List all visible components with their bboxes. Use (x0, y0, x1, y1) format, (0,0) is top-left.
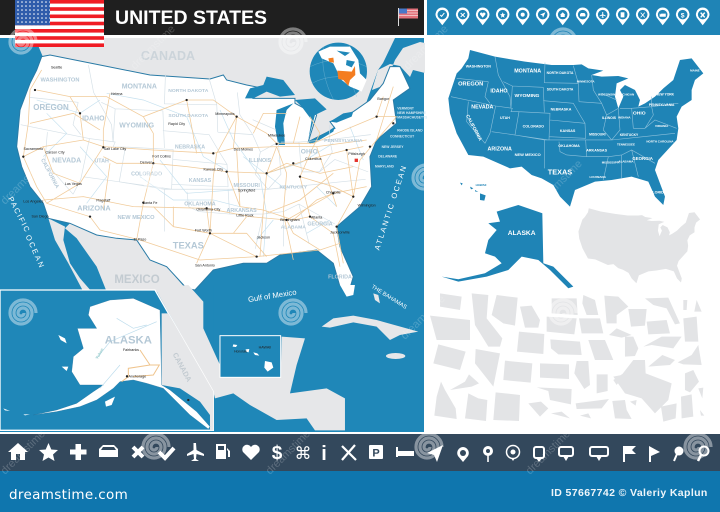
Pacific Ocean label (6, 195, 47, 271)
Alaska islands (3, 335, 115, 415)
northeast state labels: NEW HAMPSHIRE (397, 111, 427, 115)
state labels: MAINE (690, 69, 700, 73)
state labels: ARKANSAS (227, 208, 257, 214)
state labels: TENNESSEE (617, 143, 635, 147)
icon: cross (133, 447, 143, 457)
city labels: Bangor (377, 97, 390, 101)
state labels: NEVADA (471, 105, 494, 111)
icon: send (427, 445, 443, 462)
contiguous US road map (17, 55, 428, 290)
Mexico landmass (65, 223, 188, 292)
state labels: GEORGIA (307, 221, 333, 227)
state labels: OKLAHOMA (558, 144, 580, 148)
city labels: San Diego (31, 214, 49, 218)
Hawaii: HAWAII (476, 183, 486, 187)
northeast state labels: MARYLAND (375, 164, 394, 168)
Arctic water (337, 51, 355, 67)
Cuba (322, 316, 418, 340)
watermark text: dreamstime (536, 158, 585, 207)
state labels: WYOMING (515, 93, 540, 99)
state labels: INDIANA (618, 115, 631, 119)
state labels: SOUTH DAKOTA (168, 113, 209, 119)
state labels: FLORIDA (650, 191, 667, 195)
Mexico label: MEXICO (114, 274, 160, 286)
North America land (318, 47, 367, 92)
state labels: MISSOURI (589, 132, 606, 136)
Canada landmass (35, 38, 395, 150)
state labels: MONTANA (514, 68, 541, 74)
city labels: Little Rock (236, 214, 254, 218)
city labels: Springfield (238, 189, 255, 193)
city labels: Kansas City (204, 168, 223, 172)
Yukon label: Yukon (94, 347, 105, 360)
state labels: NEBRASKA (551, 107, 572, 111)
state labels: ARKANSAS (586, 148, 608, 152)
state labels: ALABAMA (281, 225, 306, 231)
state labels: PENNSYLVANIA (324, 138, 363, 144)
state labels: WASHINGTON (466, 65, 491, 69)
northeast state labels: DELAWARE (378, 154, 398, 158)
city labels: Denver (140, 160, 153, 164)
icon: plane (187, 443, 204, 461)
gray US silhouette (578, 208, 700, 283)
state labels: GEORGIA (632, 156, 654, 161)
icon: pin outline (457, 447, 469, 462)
state labels: ALABAMA (618, 159, 634, 163)
Pacific Ocean label: OCEAN (24, 233, 47, 271)
state labels: NEW MEXICO (117, 215, 155, 221)
Gulf of Mexico label: Gulf of Mexico (247, 288, 297, 304)
panel: Gulf and Caribbean (155, 284, 424, 430)
Canadian Maritimes (372, 42, 425, 90)
inset globe (310, 43, 367, 100)
dreamstime logo: dreamstime.com (9, 487, 128, 503)
pin: star (496, 8, 509, 25)
globe graticule (310, 45, 367, 99)
northeast state labels (375, 106, 428, 168)
Canada inset label: CANADA (171, 351, 194, 384)
Pacific Ocean label: PACIFIC (6, 195, 32, 235)
state labels: OREGON (458, 81, 483, 87)
city labels: Salt Lake City (104, 147, 126, 151)
state labels: MINNESOTA (577, 80, 595, 84)
city labels: Milwaukee (268, 134, 285, 138)
Florida tip (340, 285, 355, 297)
major cities (22, 89, 394, 258)
watermark text: dreamstime (399, 293, 448, 342)
image ID credit: ID 57667742 © Valeriy Kaplun (551, 487, 708, 499)
contiguous US shape (448, 50, 703, 207)
city labels: Pittsburgh (348, 152, 365, 156)
Canada strip (162, 313, 213, 430)
state labels: IDAHO (82, 116, 105, 123)
state labels: WASHINGTON (41, 77, 79, 83)
state labels: SOUTH DAKOTA (547, 87, 574, 91)
state labels (33, 77, 363, 281)
Alaska (442, 205, 573, 288)
state labels: NEBRASKA (175, 145, 205, 151)
icon: medium callout (559, 447, 573, 461)
city labels: Des Moines (234, 148, 253, 152)
pin: home (556, 8, 569, 25)
pin: dollar (676, 8, 689, 25)
icon: command: ⌘ (294, 444, 312, 464)
state labels: NEW YORK (656, 93, 675, 97)
city labels (23, 65, 390, 268)
Great Lakes (245, 77, 353, 145)
state labels: OREGON (33, 103, 69, 112)
state labels: NORTH DAKOTA (547, 71, 574, 75)
icon: magnifier (698, 446, 708, 461)
Central America land (155, 285, 345, 430)
icon: fuel pump (216, 444, 230, 459)
state labels: KANSAS (560, 129, 576, 133)
pin: bed (656, 8, 669, 25)
Alaska rivers (97, 318, 157, 388)
state labels: IDAHO (490, 89, 508, 95)
header title: UNITED STATES (115, 7, 267, 29)
icon: info: i (321, 443, 327, 465)
Alaska label: ALASKA (105, 334, 152, 346)
Hawaii inset: HAWAII (259, 345, 271, 349)
icon: notched flag (623, 446, 636, 462)
city labels: Jacksonville (330, 230, 350, 234)
Alaska cities: Anchorage (128, 375, 146, 379)
header bar (0, 0, 424, 35)
city labels: Atlanta (311, 215, 323, 219)
state labels: KENTUCKY (279, 185, 308, 191)
city labels: Santa Fe (143, 201, 157, 205)
pin: fuel (616, 8, 629, 25)
icon: parking: P (372, 448, 380, 460)
state labels: UTAH (94, 158, 109, 164)
footer bar (0, 471, 720, 512)
Alaska roads (122, 350, 159, 382)
city labels: Birmingham (280, 218, 300, 222)
city labels: Minneapolis (215, 112, 235, 116)
state labels: MISSISSIPPI (602, 161, 620, 165)
Atlantic Ocean label: ATLANTIC OCEAN (372, 163, 409, 251)
state labels: WYOMING (119, 123, 154, 130)
state labels: MISSOURI (233, 183, 260, 189)
state labels: OHIO (301, 148, 318, 155)
city labels: Los Angeles (23, 200, 43, 204)
small flag icon (398, 8, 418, 26)
Bahamas (373, 293, 380, 303)
Alaska cities (123, 348, 189, 401)
icon: fork and knife (342, 445, 356, 460)
panel: Alaska inset (0, 290, 213, 430)
icon: round pin (483, 446, 493, 462)
Bahamas label: THE BAHAMAS (370, 284, 408, 311)
state labels: NORTH CAROLINA (646, 139, 674, 143)
Hawaii (460, 183, 486, 201)
state labels: KENTUCKY (620, 133, 639, 137)
state labels: TEXAS (548, 168, 572, 177)
city labels: Jackson (257, 235, 270, 239)
state labels: CALIFORNIA (465, 114, 483, 142)
state labels: CALIFORNIA (39, 158, 60, 190)
panel: scattered gray states (430, 293, 704, 422)
state labels: MICHIGAN (619, 93, 634, 97)
state labels: UTAH (500, 116, 510, 120)
state labels: ARIZONA (77, 203, 111, 212)
icon: pennant flag (649, 446, 660, 462)
icon: target pin (506, 446, 520, 461)
panel: main road map (0, 38, 428, 432)
northeast state labels: VERMONT (397, 106, 414, 110)
watermark text: dreamstime (129, 23, 178, 72)
state labels: NEVADA (52, 157, 81, 164)
icon toolbar (0, 434, 720, 471)
Canada label: CANADA (141, 49, 195, 63)
pin: plane (596, 8, 609, 25)
icon: heart (242, 445, 260, 460)
Alaska cities: Fairbanks (123, 348, 139, 352)
state labels: ILLINOIS (249, 158, 272, 164)
pin icon strip (427, 0, 720, 35)
state labels: ILLINOIS (602, 116, 617, 120)
Hawaii inset: Honolulu (234, 350, 247, 354)
state labels: COLORADO (131, 171, 162, 177)
icon: plus (70, 444, 86, 460)
rivers (37, 93, 363, 257)
icon: wide callout (590, 447, 608, 461)
pin: heart (476, 8, 489, 25)
state labels: VIRGINIA (655, 124, 669, 128)
city labels: San Antonio (195, 264, 215, 268)
Hawaii inset (220, 336, 281, 377)
northeast state labels: CONNECTICUT (390, 135, 414, 139)
state labels: MONTANA (122, 84, 157, 91)
city labels: Charlotte (326, 190, 341, 194)
city labels: Carson City (45, 150, 65, 154)
city labels: El Paso (134, 238, 146, 242)
watermark text (0, 23, 585, 477)
pin: cross (456, 8, 469, 25)
city labels: Sacramento (23, 147, 43, 151)
watermark text: dreamstime (524, 428, 573, 477)
icon: parking (369, 445, 383, 460)
state labels: COLORADO (523, 125, 544, 129)
icon: car (99, 445, 118, 457)
Baja California (48, 218, 92, 292)
northeast state labels: RHODE ISLAND (397, 129, 423, 133)
northeast state labels: MASSACHUSETTS (397, 116, 428, 120)
city labels: Fort Worth (195, 229, 212, 233)
pin: command (696, 8, 709, 25)
Hispaniola (386, 353, 405, 359)
highways (23, 70, 397, 267)
Alaska: ALASKA (508, 230, 536, 237)
US highlighted (328, 58, 355, 86)
city labels: Seattle (51, 65, 62, 69)
state labels: PENNSYLVANIA (649, 103, 675, 107)
state labels: OHIO (633, 110, 646, 116)
state labels: FLORIDA (328, 275, 352, 281)
state labels: ARIZONA (488, 146, 512, 152)
icon: bed (396, 447, 414, 457)
city labels: Rapid City (168, 122, 185, 126)
capital marker (355, 159, 358, 162)
pin: dot (516, 8, 529, 25)
watermark text: dreamstime (0, 428, 48, 477)
icon: home (8, 443, 28, 460)
icon: square callout (534, 447, 544, 462)
city labels: Flagstaff (96, 199, 111, 203)
state labels: NEW MEXICO (515, 152, 541, 157)
city labels: Columbus (305, 157, 322, 161)
state labels: WISCONSIN (598, 92, 615, 96)
icon: dollar: $ (272, 443, 283, 464)
icon: check (159, 448, 174, 458)
pin: navigation (536, 8, 549, 25)
state labels: OKLAHOMA (184, 201, 216, 207)
pin: car (576, 8, 589, 25)
city labels: Fort Collins (152, 154, 171, 158)
state labels (458, 65, 700, 195)
city labels: Wilmington (358, 204, 376, 208)
watermark text: dreamstime (402, 23, 451, 72)
state labels: NORTH DAKOTA (168, 88, 209, 94)
watermark text: dreamstime (0, 158, 48, 207)
pin: fork and knife (636, 8, 649, 25)
city labels: Las Vegas (65, 182, 82, 186)
icon: solid pushpin (674, 446, 684, 461)
state borders (451, 57, 678, 180)
state labels: KANSAS (189, 178, 212, 184)
pin: dollar: $ (681, 12, 685, 19)
city labels: Helena (111, 92, 123, 96)
panel: blue state map (442, 50, 703, 288)
state labels: LOUISIANA (589, 175, 607, 179)
icon: star (39, 443, 58, 461)
state labels: TEXAS (173, 240, 204, 250)
main flag (15, 0, 104, 47)
northeast state labels: NEW JERSEY (382, 145, 404, 149)
city labels: Oklahoma City (196, 208, 220, 212)
pin: check (436, 8, 449, 25)
watermark text: dreamstime (264, 428, 313, 477)
Alaska shape (33, 298, 210, 429)
state borders (21, 65, 371, 249)
